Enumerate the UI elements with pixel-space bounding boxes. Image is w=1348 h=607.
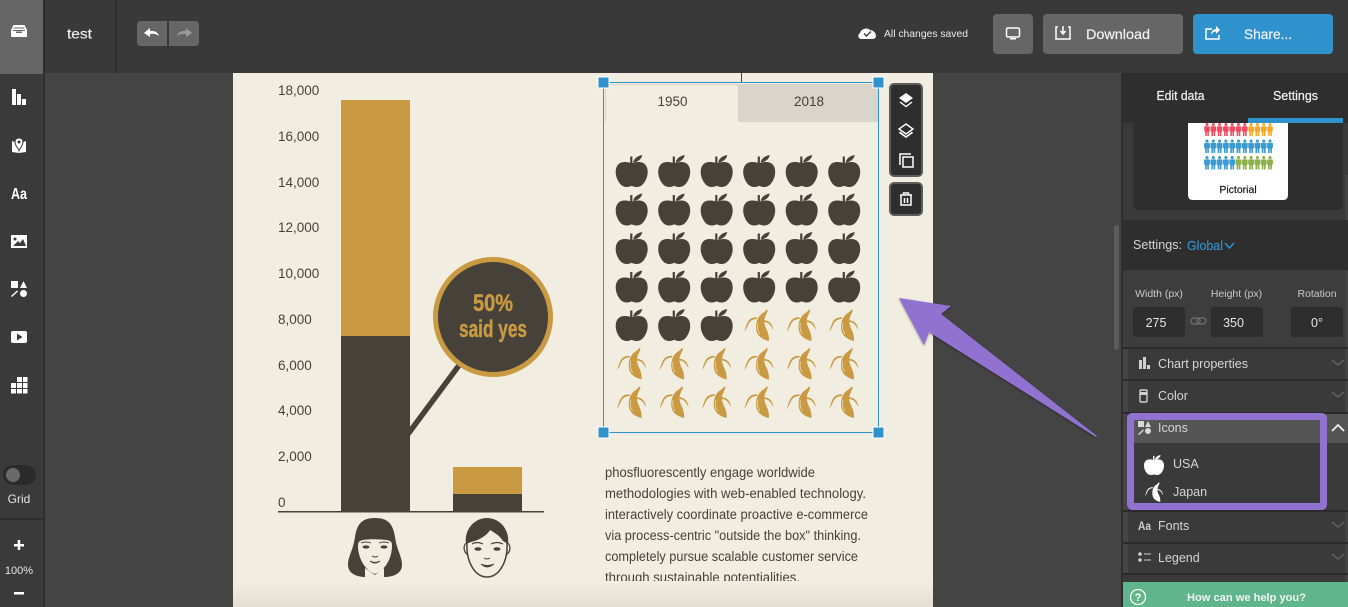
icon: send backward bbox=[899, 124, 913, 138]
body text: interactively coordinate proactive e-commerce bbox=[605, 507, 868, 522]
y axis labels: 10,000 bbox=[278, 266, 319, 281]
dimension fields bbox=[1123, 270, 1345, 347]
canvas scrollbar bbox=[1114, 225, 1119, 350]
body text: via process-centric "outside the box" thinking. bbox=[605, 528, 861, 543]
y axis labels: 18,000 bbox=[278, 83, 319, 98]
right settings panel bbox=[1121, 73, 1348, 607]
accordion: fonts bbox=[1123, 510, 1348, 533]
selection box with handles bbox=[598, 77, 884, 438]
icon: bring forward bbox=[899, 93, 913, 106]
accordion: color bbox=[1123, 379, 1348, 403]
floating toolbar bbox=[890, 84, 922, 215]
chart type preview bbox=[1133, 123, 1343, 210]
icon: shapes bbox=[11, 281, 27, 297]
pictorial icon grid bbox=[616, 155, 860, 418]
grid toggle bbox=[3, 465, 36, 506]
legend row: Japan: Japan bbox=[1173, 485, 1207, 499]
icon: map bbox=[12, 138, 26, 153]
accordion: chart properties: Chart properties bbox=[1158, 357, 1248, 371]
settings selector: Global bbox=[1187, 239, 1223, 253]
icon: more grid bbox=[11, 377, 28, 394]
bananas bbox=[617, 310, 858, 418]
redo button bbox=[169, 21, 199, 46]
dimension fields: 275 bbox=[1146, 316, 1166, 330]
settings selector: Settings: bbox=[1133, 238, 1182, 252]
accordion: color: Color bbox=[1158, 389, 1188, 403]
help bar: How can we help you? bbox=[1187, 592, 1306, 604]
icon: man face bbox=[464, 518, 510, 577]
top bar bbox=[0, 0, 1348, 74]
legend row: USA bbox=[1144, 455, 1199, 475]
dimension fields: Height (px) bbox=[1211, 288, 1262, 300]
document name: test bbox=[67, 26, 92, 42]
body text: completely pursue scalable customer service bbox=[605, 549, 858, 564]
accordion: icons bbox=[1123, 412, 1348, 509]
icon: link bbox=[1191, 318, 1206, 324]
tab: 2018: 2018 bbox=[794, 94, 824, 109]
y axis labels: 2,000 bbox=[278, 449, 312, 464]
icon: text: Aa bbox=[11, 186, 27, 203]
help bar: ? bbox=[1135, 592, 1142, 604]
pictorial chart tabs bbox=[605, 73, 878, 122]
dimension fields: Width (px) bbox=[1135, 288, 1183, 300]
body text: phosfluorescently engage worldwide bbox=[605, 465, 815, 480]
y axis labels: 16,000 bbox=[278, 129, 319, 144]
callout: 50% said yes bbox=[341, 260, 550, 440]
y axis labels: 12,000 bbox=[278, 220, 319, 235]
arrow pointing to the pictorial chart bbox=[899, 298, 1097, 437]
y axis labels: 0 bbox=[278, 495, 286, 510]
bar: men bbox=[453, 467, 522, 512]
icon: charts bbox=[12, 89, 26, 105]
icon: woman face bbox=[348, 518, 402, 577]
callout: 50% said yes: 50% bbox=[473, 290, 513, 317]
y axis labels: 14,000 bbox=[278, 175, 319, 190]
y axis labels: 6,000 bbox=[278, 358, 312, 373]
body text: through sustainable potentialities. bbox=[605, 570, 800, 585]
icon: trash bbox=[900, 193, 912, 205]
chart type preview: Pictorial bbox=[1219, 184, 1257, 196]
zoom controls: 100% bbox=[5, 565, 33, 577]
icon: duplicate bbox=[900, 154, 913, 167]
panel tabs: Edit data bbox=[1156, 89, 1205, 103]
apples bbox=[616, 155, 860, 341]
infographic page bbox=[233, 73, 933, 607]
share button bbox=[1193, 14, 1333, 54]
accordion: fonts: Fonts bbox=[1158, 519, 1189, 533]
y axis labels: 8,000 bbox=[278, 312, 312, 327]
accordion: fonts: Aa bbox=[1138, 519, 1151, 533]
grid toggle: Grid bbox=[8, 492, 30, 506]
download button: Download bbox=[1086, 26, 1150, 42]
dimension fields: 350 bbox=[1223, 316, 1244, 330]
share button: Share... bbox=[1244, 26, 1292, 42]
stacked bar chart bbox=[278, 83, 544, 512]
accordion: legend bbox=[1123, 542, 1348, 565]
bar: women bbox=[341, 100, 410, 512]
highlight box around icons settings bbox=[1130, 416, 1324, 506]
pictorial thumbnail people bbox=[1204, 123, 1273, 170]
accordion: legend: Legend bbox=[1158, 551, 1200, 565]
accordion: icons: Icons bbox=[1158, 421, 1188, 435]
tab: 1950 bbox=[606, 85, 738, 122]
help bar bbox=[1123, 582, 1348, 607]
dimension fields: Rotation bbox=[1297, 288, 1337, 300]
settings selector bbox=[1123, 220, 1348, 270]
y axis labels: 4,000 bbox=[278, 403, 312, 418]
y axis labels bbox=[278, 83, 319, 510]
body text: methodologies with web-enabled technology. bbox=[605, 486, 866, 501]
preview button bbox=[993, 14, 1033, 54]
icon: video bbox=[11, 331, 27, 343]
callout: 50% said yes: said yes bbox=[459, 316, 527, 343]
panel tabs: Settings bbox=[1273, 89, 1318, 103]
zoom controls bbox=[5, 540, 33, 594]
icon: image bbox=[11, 235, 27, 248]
panel tabs bbox=[1121, 73, 1348, 123]
legend row: USA: USA bbox=[1173, 457, 1199, 471]
menu button bbox=[0, 0, 43, 74]
tab: 1950: 1950 bbox=[657, 94, 688, 109]
left sidebar bbox=[0, 0, 45, 607]
legend row: Japan bbox=[1145, 482, 1207, 502]
dimension fields: 0° bbox=[1311, 316, 1323, 330]
undo button bbox=[137, 21, 167, 46]
save status: All changes saved bbox=[884, 28, 968, 40]
accordion: chart properties bbox=[1123, 347, 1348, 371]
body text bbox=[605, 465, 868, 585]
download button bbox=[1043, 14, 1183, 54]
